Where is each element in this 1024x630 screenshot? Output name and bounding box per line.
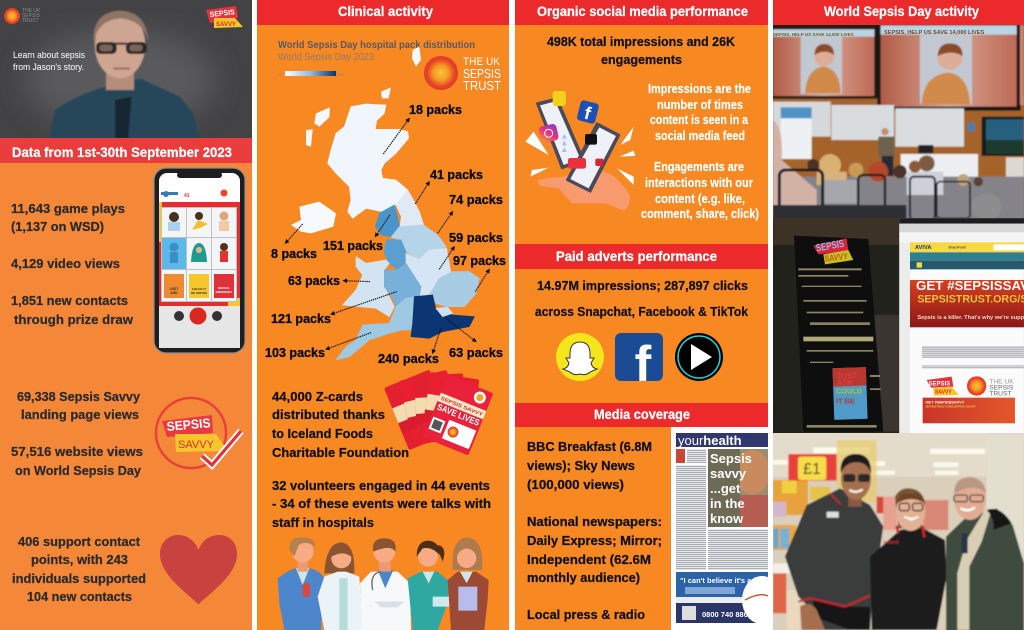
figure: male doctor (360, 538, 411, 630)
icon: likes badge (568, 158, 586, 169)
icon: Sepsis Savvy badge: SAVVY (216, 21, 237, 28)
illustration: Z-cards fan: SEPSIS SAVVY (440, 396, 484, 418)
icon: phone with Sepsis Savvy game: 41 (184, 193, 190, 199)
heading: data period: Data from 1st-30th September 2023 (12, 144, 232, 160)
map labels: pack counts: 151 packs (323, 238, 383, 253)
illustration: Z-cards fan (384, 370, 493, 455)
video caption (13, 50, 85, 72)
map title (278, 40, 475, 63)
heading: clinical activity: Clinical activity (338, 3, 433, 19)
text block: web statistics: 57,516 website views (11, 444, 143, 459)
photo: illuminated tower and Aviva intranet: IT BE (836, 396, 855, 405)
photo: Jason's story video still (0, 0, 252, 138)
text block: media coverage: monthly audience) (527, 570, 640, 585)
photo: illuminated tower and Aviva intranet (770, 215, 1024, 438)
heading: organic social: Organic social media performance (537, 3, 748, 19)
map labels: pack counts: 97 packs (453, 253, 506, 268)
icon: Sepsis Savvy circle with tick: SAVVY (178, 439, 215, 451)
text block: paid stats: 14.97M impressions; 287,897 clicks (537, 278, 748, 293)
heading: clinical activity (257, 0, 509, 25)
text: screen slogan: SEPSIS, HELP US SAVE 14,000 LIVES (884, 30, 984, 36)
text block: game statistics (11, 201, 134, 327)
text block: media coverage: views); Sky News (527, 458, 635, 473)
text block: web statistics: 69,338 Sepsis Savvy (17, 389, 141, 404)
icon: UK Sepsis Trust logo: THE UK (463, 56, 501, 68)
text block: game statistics: 11,643 game plays (11, 201, 125, 216)
heading: organic social (515, 0, 768, 25)
figure: nurse in teal (408, 541, 449, 630)
map labels: pack counts: 103 packs (265, 345, 325, 360)
text block: definitions: content (e.g. like, (655, 191, 745, 206)
photo: illuminated tower and Aviva intranet: COULD (836, 386, 862, 395)
map labels: pack counts: 121 packs (271, 311, 331, 326)
photo: illuminated tower and Aviva intranet: TRUST (989, 391, 1011, 398)
icon: UK Sepsis Trust logo: TRUST (22, 18, 39, 24)
text block: definitions: number of times (657, 97, 743, 112)
icon: phone with Sepsis Savvy game: COULD IT (192, 287, 206, 291)
text block: support statistics: 406 support contact (18, 534, 141, 549)
text block: media coverage: BBC Breakfast (6.8M (527, 439, 652, 454)
text block: media coverage: Independent (62.6M (527, 552, 651, 567)
map title: World Sepsis Day 2023 (278, 52, 374, 63)
text block: media coverage (527, 439, 662, 622)
icon: Snapchat logo (556, 333, 604, 381)
figure: nurse in blue (278, 537, 324, 630)
map legend (279, 71, 344, 77)
heading: media coverage (515, 403, 768, 427)
map labels: pack counts: 18 packs (409, 102, 462, 117)
photo: illuminated tower and Aviva intranet: ASK (837, 379, 854, 388)
photo: illuminated tower and Aviva intranet: SEPSIS (929, 381, 951, 388)
text block: web statistics: on World Sepsis Day (15, 463, 142, 478)
icon: phone with Sepsis Savvy game: MEDICAL (218, 286, 230, 290)
text block: paid stats: across Snapchat, Facebook & TikTok (535, 304, 749, 319)
text block: web statistics (11, 389, 143, 478)
text block: game statistics: 4,129 video views (11, 256, 120, 271)
headline stat: impressions and engagements (547, 34, 736, 67)
photo: Iceland store visit: £1 (803, 461, 821, 478)
text: screen slogan: SEPSIS, HELP US SAVE 14,000 LIVES (773, 32, 854, 37)
heading: media coverage: Media coverage (594, 406, 690, 422)
text block: volunteers: 32 volunteers engaged in 44 events (272, 478, 490, 493)
photo: illuminated tower and Aviva intranet: SAVVY (935, 390, 952, 396)
image: newspaper clipping: 0800 740 8800 (702, 610, 752, 619)
image: newspaper clipping: yourhealth (678, 433, 742, 448)
map title: World Sepsis Day hospital pack distribution (278, 40, 475, 51)
heading: paid adverts: Paid adverts performance (556, 248, 717, 264)
icon: Sepsis Savvy badge: SEPSIS (209, 7, 235, 19)
illustration: healthcare staff (278, 537, 489, 630)
photo: Iceland store visit (770, 430, 1024, 630)
panel: data column (0, 0, 252, 630)
icon: UK Sepsis Trust logo (424, 56, 501, 93)
icon: phone with Sepsis Savvy game: JUST (170, 287, 179, 291)
text block: definitions (641, 81, 759, 221)
map labels: pack counts: 59 packs (449, 230, 503, 245)
icon: UK Sepsis Trust logo (4, 8, 41, 24)
man in dark jacket (785, 454, 883, 630)
icon: TikTok (585, 134, 597, 145)
heading: WSD activity (773, 0, 1024, 25)
icon: Sepsis Savvy badge (206, 6, 243, 28)
icon: Instagram (538, 123, 559, 143)
icon: UK Sepsis Trust logo: THE UK (22, 8, 41, 14)
map labels: pack counts: 240 packs (378, 351, 439, 366)
icon: phone with Sepsis Savvy game (154, 168, 245, 353)
heading: WSD activity: World Sepsis Day activity (824, 3, 979, 19)
text block: media coverage: Local press & radio (527, 607, 645, 622)
map labels: pack counts: 63 packs (449, 345, 503, 360)
text block: definitions: social media feed (655, 128, 745, 143)
icon: phone with Sepsis Savvy game: BE SEPSIS (191, 291, 207, 295)
text block: web statistics: landing page views (21, 407, 139, 422)
photo: lecture theatre (770, 23, 1024, 223)
chart: UK choropleth map of packs (285, 47, 489, 360)
panel: clinical activity (257, 0, 509, 630)
text block: Z-cards: distributed thanks (272, 407, 385, 422)
icon: Facebook: f (582, 103, 594, 124)
icon: phone with Sepsis Savvy game: ASK (170, 291, 178, 295)
heading: data period (0, 138, 252, 163)
photo: illuminated tower and Aviva intranet: SharePoint (948, 246, 967, 250)
image: newspaper clipping: savvy (710, 466, 747, 481)
text block: Z-cards: Charitable Foundation (272, 445, 409, 460)
text block: definitions: comment, share, click) (641, 206, 759, 221)
image: newspaper clipping: "I can't believe it's a hearing (680, 576, 781, 585)
icon: heart (160, 535, 237, 604)
icon: Sepsis Savvy circle with tick: SEPSIS (166, 415, 211, 434)
image: newspaper clipping: Sepsis (710, 451, 752, 466)
text: screen slogan (773, 30, 984, 37)
text block: game statistics: (1,137 on WSD) (11, 219, 104, 234)
headline stat: impressions and engagements: engagements (601, 52, 682, 67)
map labels: pack counts: 8 packs (271, 246, 317, 261)
icon: Facebook logo (615, 333, 663, 392)
photo: illuminated tower and Aviva intranet: SAVVY (824, 251, 849, 264)
video caption: Learn about sepsis (13, 50, 85, 60)
text block: Z-cards (272, 389, 409, 460)
photo: illuminated tower and Aviva intranet: SEPSISTRUST.ORG/SEPSIS-SAVVY (925, 405, 976, 409)
map legend: 0 (279, 72, 282, 77)
text block: paid stats (535, 278, 749, 319)
image: newspaper clipping: know (710, 511, 744, 526)
arrows: region pointers (285, 118, 489, 353)
text block: game statistics: through prize draw (14, 312, 134, 327)
text block: definitions: Engagements are (654, 159, 744, 174)
text block: Z-cards: to Iceland Foods (272, 426, 373, 441)
headline stat: impressions and engagements: 498K total impressions and 26K (547, 34, 736, 49)
photo: illuminated tower and Aviva intranet: SEPSIS (815, 238, 845, 255)
icon: TikTok play logo (675, 333, 723, 381)
figure: doctor with long hair (318, 542, 363, 630)
photo: illuminated tower and Aviva intranet: GET #SEPSISSAVVY (925, 400, 965, 405)
map labels: pack counts: 74 packs (449, 192, 503, 207)
text block: definitions: content is seen in a (650, 112, 749, 127)
photo: illuminated tower and Aviva intranet: AVIVA (915, 245, 931, 251)
text block: support statistics: 104 new contacts (27, 589, 132, 604)
text block: media coverage: National newspapers: (527, 514, 662, 529)
text block: support statistics: individuals supported (12, 571, 146, 586)
icon: phone with Sepsis Savvy game: EMERGENCY (216, 290, 233, 294)
heading: paid adverts (515, 244, 768, 269)
icon: Snapchat (553, 91, 566, 106)
text block: support statistics (12, 534, 146, 604)
text block: definitions: Impressions are the (648, 81, 751, 96)
text block: volunteers (272, 478, 491, 530)
icon: UK Sepsis Trust logo: TRUST (463, 78, 501, 93)
man in green jacket (946, 477, 1024, 630)
icon: UK Sepsis Trust logo: SEPSIS (22, 13, 41, 19)
image: newspaper clipping (671, 427, 768, 630)
text block: volunteers: staff in hospitals (272, 515, 374, 530)
woman in black uniform: Iceland (883, 540, 899, 545)
icon: Facebook logo: f (635, 336, 652, 392)
illustration: Z-cards fan: SAVE LIVES (436, 402, 481, 428)
icon: UK Sepsis Trust logo: SEPSIS (463, 66, 501, 81)
text block: game statistics: 1,851 new contacts (11, 293, 128, 308)
photo: illuminated tower and Aviva intranet: THE UK (989, 378, 1014, 385)
map legend: 240 (337, 72, 344, 77)
map labels: pack counts: 41 packs (430, 167, 483, 182)
image: newspaper clipping: ...get (710, 481, 741, 496)
map labels: pack counts: 63 packs (288, 273, 340, 288)
illustration: hand holding phones with social icons (525, 91, 635, 210)
woman in black uniform (870, 488, 947, 630)
panel: World Sepsis Day activity (770, 0, 1024, 630)
video caption: from Jason's story. (13, 62, 84, 72)
photo: illuminated tower and Aviva intranet: JUST (837, 371, 857, 380)
text block: Z-cards: 44,000 Z-cards (272, 389, 363, 404)
figure: nurse with clipboard (448, 538, 489, 630)
icon: video badge (595, 159, 603, 166)
map labels: pack counts (265, 102, 506, 366)
icon: Sepsis Savvy circle with tick (156, 398, 241, 468)
text block: support statistics: points, with 243 (31, 552, 128, 567)
photo: illuminated tower and Aviva intranet: SEPSIS (989, 385, 1014, 392)
panel: organic social media (515, 0, 782, 630)
text block: media coverage: Daily Express; Mirror; (527, 533, 662, 548)
text block: media coverage: (100,000 views) (527, 477, 624, 492)
image: newspaper clipping: in the (710, 496, 745, 511)
text block: definitions: interactions with our (645, 175, 753, 190)
text block: volunteers: - 34 of these events were talks with (272, 496, 491, 511)
